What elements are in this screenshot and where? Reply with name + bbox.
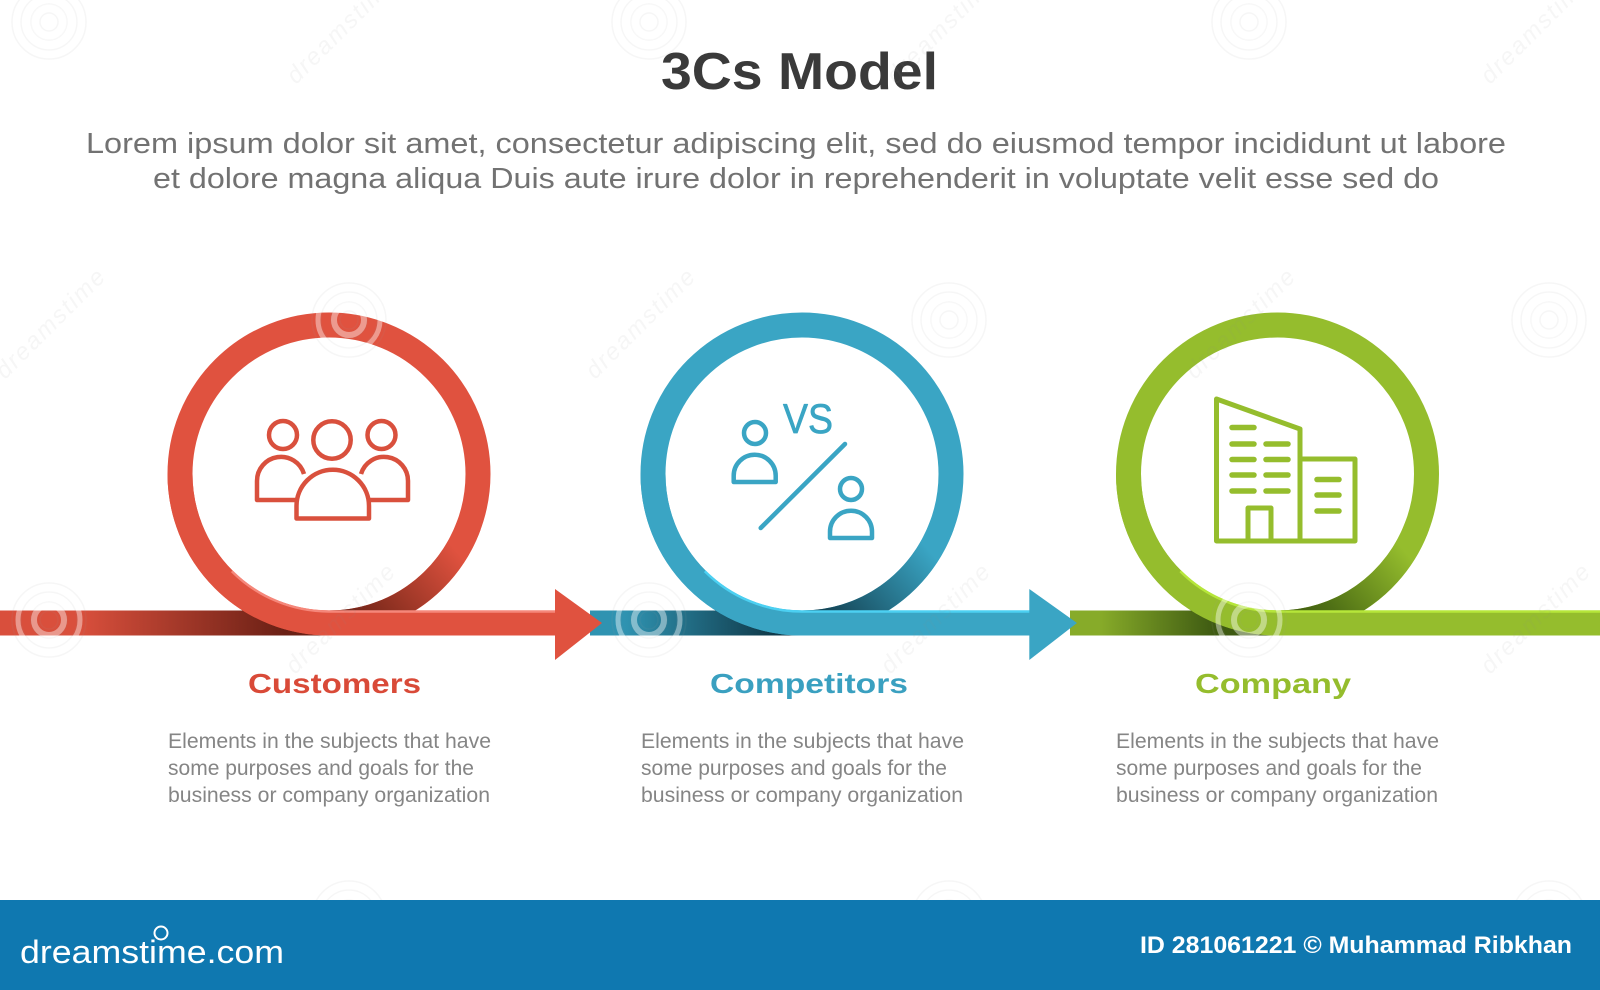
panel: company loop <box>1070 325 1600 636</box>
text block: company: some purposes and goals for the <box>1116 757 1422 780</box>
text block: competitors: business or company organization <box>641 784 963 807</box>
intro text: et dolore magna aliqua Duis aute irure dolor in reprehenderit in voluptate velit esse sed do <box>153 163 1439 195</box>
footer bar <box>0 900 1600 990</box>
logo: dreamstime.com <box>20 934 284 970</box>
intro text <box>86 128 1506 195</box>
heading: competitors: Competitors <box>710 668 908 699</box>
title: 3Cs Model <box>661 43 938 101</box>
text block: company <box>1116 730 1439 807</box>
text block: company: business or company organization <box>1116 784 1438 807</box>
watermark: dreamstime <box>1475 557 1597 679</box>
watermark: dreamstime <box>580 262 702 384</box>
text block: customers: Elements in the subjects that have <box>168 730 491 753</box>
heading: customers: Customers <box>248 668 421 699</box>
intro text: Lorem ipsum dolor sit amet, consectetur adipiscing elit, sed do eiusmod tempor incididunt ut labore <box>86 128 1506 160</box>
watermark: dreamstime <box>875 557 997 679</box>
text block: customers: some purposes and goals for the <box>168 757 474 780</box>
panel: customers loop <box>0 325 602 660</box>
text block: competitors: some purposes and goals for the <box>641 757 947 780</box>
heading: company: Company <box>1195 668 1352 699</box>
panel: competitors loop <box>590 325 1077 660</box>
text block: customers <box>168 730 491 807</box>
icon: versus <box>734 395 872 538</box>
text block: competitors: Elements in the subjects that have <box>641 730 964 753</box>
credit: ID 281061221 © Muhammad Ribkhan <box>1140 932 1572 959</box>
icon: versus: VS <box>783 395 833 442</box>
text block: customers: business or company organization <box>168 784 490 807</box>
watermark: dreamstime <box>280 557 402 679</box>
text block: competitors <box>641 730 964 807</box>
arrow: customers <box>555 589 602 660</box>
icon: buildings <box>1216 399 1355 541</box>
text block: company: Elements in the subjects that have <box>1116 730 1439 753</box>
arrow: competitors <box>1029 589 1077 660</box>
watermark: dreamstime <box>1180 262 1302 384</box>
icon: customers group <box>257 421 408 518</box>
